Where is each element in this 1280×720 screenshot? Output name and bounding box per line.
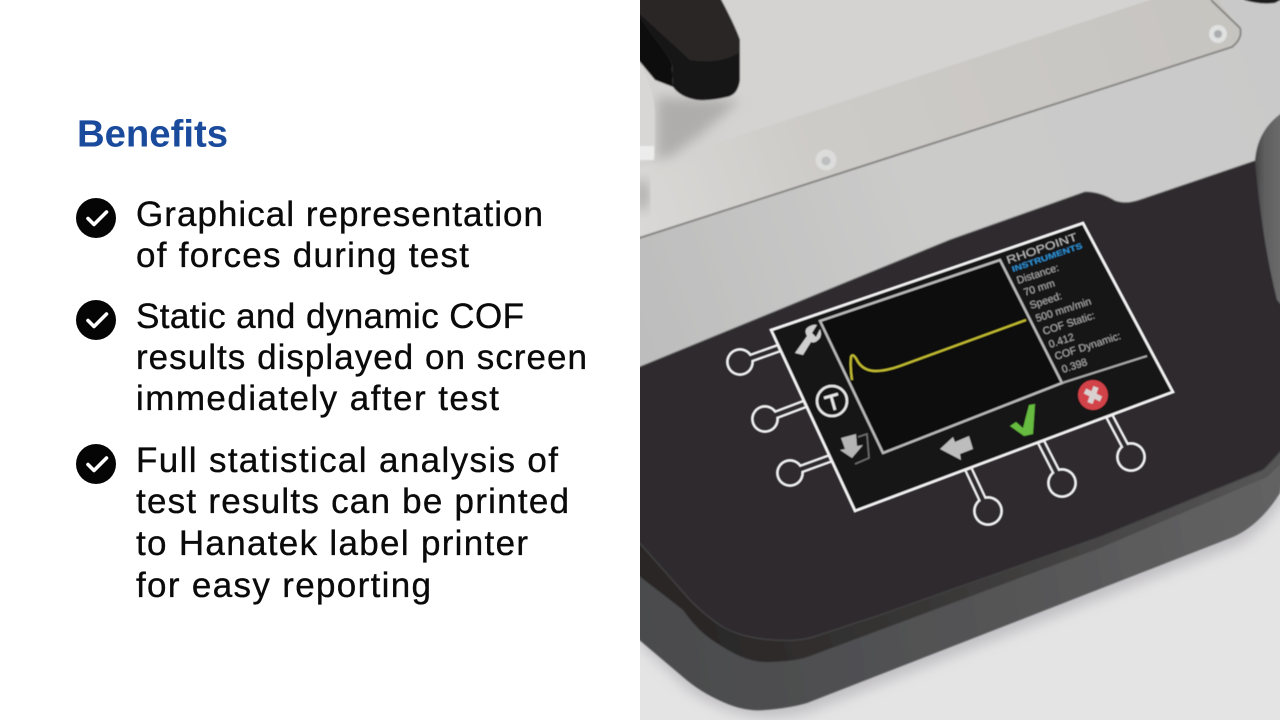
text: screen readout: 0.398	[1060, 356, 1089, 376]
icon: red cross	[1078, 380, 1108, 410]
benefit item 1	[76, 195, 543, 275]
top surface	[640, 0, 1150, 168]
icon: T circle	[817, 386, 847, 416]
text: graphical representation	[136, 195, 543, 275]
button rings	[726, 348, 1146, 526]
text: full statistical analysis: to Hanatek label printer	[136, 524, 528, 563]
icon: green check	[1010, 404, 1035, 436]
text: full statistical analysis: test results can be printed	[136, 482, 569, 521]
text: screen readout: 0.412	[1047, 331, 1076, 351]
plate smudge	[636, 179, 648, 211]
icon: check badge 2	[76, 300, 116, 340]
text: screen readout: 70 mm	[1022, 277, 1057, 299]
icon: export arrow	[840, 434, 869, 464]
line chart: force curve	[851, 320, 1026, 380]
text: graphical representation: of forces during test	[136, 236, 469, 275]
icon: white bracket	[640, 98, 655, 160]
text: screen readout: Speed:	[1028, 290, 1064, 312]
control screen graphic	[726, 223, 1173, 526]
chart area	[820, 260, 1062, 453]
photo: floor shadow	[640, 492, 1280, 720]
text: screen readout: COF Static:	[1041, 310, 1097, 338]
icon: plate screw left	[816, 150, 836, 170]
handle shadow	[657, 97, 740, 160]
icon: check badge 3	[76, 444, 116, 484]
text: screen readout: COF Dynamic:	[1053, 330, 1122, 363]
metal plate	[794, 0, 1240, 182]
rubber rim	[640, 464, 1280, 712]
panel: instrument photo	[630, 0, 1280, 720]
panel: benefits text	[0, 0, 640, 720]
text: static and dynamic COF: results displayed on screen	[136, 338, 587, 377]
button centres	[728, 350, 1144, 524]
text: static and dynamic COF: immediately after test	[136, 379, 499, 418]
text: full statistical analysis	[136, 441, 569, 605]
icon: back arrow	[940, 436, 973, 460]
photo: instrument body	[630, 0, 1280, 710]
text: full statistical analysis: Full statistical analysis of	[136, 441, 558, 480]
icon: check badge 1	[76, 198, 116, 238]
text: static and dynamic COF: Static and dynamic COF	[136, 297, 524, 336]
right side bumper	[1255, 108, 1280, 315]
icon: wrench	[795, 325, 821, 355]
button stems	[740, 346, 1131, 511]
text: screen readout: INSTRUMENTS	[1011, 241, 1084, 274]
text: full statistical analysis: for easy reporting	[136, 566, 431, 605]
benefit item 3	[76, 441, 569, 605]
text: screen readout: RHOPOINT	[1005, 231, 1079, 267]
icon: plate screw right	[1209, 25, 1227, 43]
metal band below plate	[640, 0, 1280, 367]
text: screen readout	[1005, 231, 1122, 376]
black control panel	[630, 148, 1280, 640]
text: screen readout: Distance:	[1015, 262, 1061, 287]
text: static and dynamic COF	[136, 297, 587, 418]
icon: black handle	[630, 0, 740, 100]
top right knob	[1244, 0, 1280, 4]
text: screen readout: 500 mm/min	[1034, 296, 1093, 325]
heading: Benefits: Benefits	[77, 114, 228, 156]
footer divider	[1062, 356, 1147, 383]
screen frame	[771, 223, 1173, 511]
rim lip	[630, 440, 1280, 662]
text: graphical representation: Graphical representation	[136, 195, 543, 234]
benefit item 2	[76, 297, 587, 418]
